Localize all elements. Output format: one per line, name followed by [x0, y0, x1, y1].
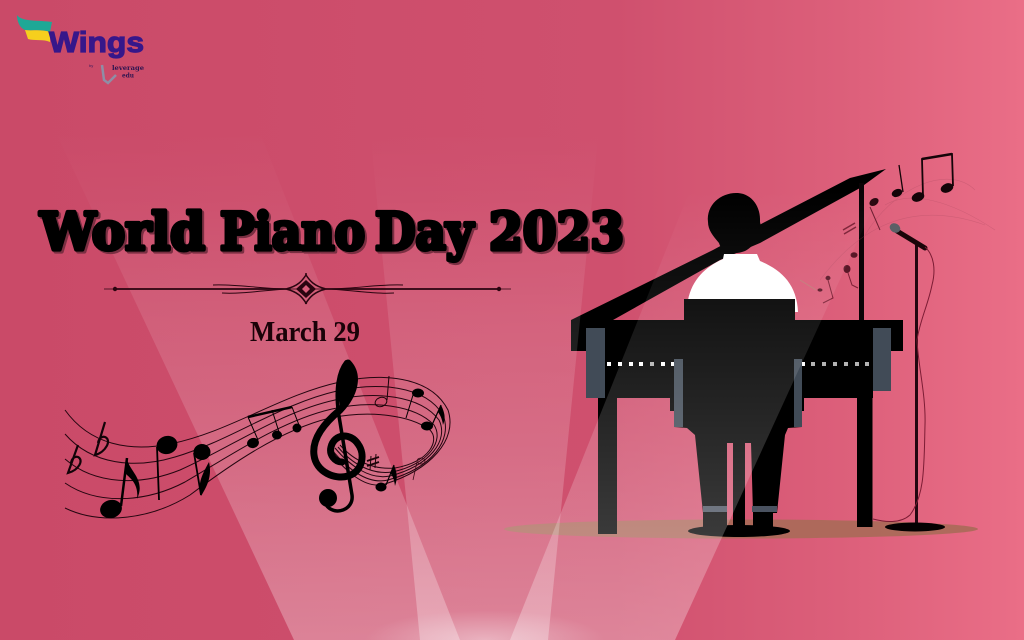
treble clef: [314, 360, 362, 511]
piano keys: [607, 362, 869, 366]
stand base: [885, 522, 945, 532]
logo: Wings by leverage edu: edu: [122, 72, 134, 80]
piano lid: [571, 169, 886, 320]
logo flag teal: [17, 15, 52, 32]
armrests: [674, 359, 683, 427]
lid prop: [859, 183, 864, 321]
beamed notes: [910, 154, 955, 204]
title: 2023: [491, 204, 626, 264]
title: World: [41, 204, 207, 264]
sharp sign: [367, 454, 379, 470]
piano legs: [598, 398, 617, 534]
floor shadow ellipse: [504, 520, 978, 538]
logo by: by: [89, 63, 93, 68]
center beam: [369, 120, 600, 640]
quarter note: [155, 434, 179, 500]
lower notes: [376, 465, 397, 492]
faint staff arcs: [820, 179, 995, 280]
left beam: [50, 120, 460, 640]
stand: [915, 245, 918, 527]
piano side panels: [586, 328, 605, 398]
pianist shirt: [688, 254, 798, 312]
title: Piano: [220, 202, 365, 262]
bottom glow: [365, 610, 605, 640]
ornamental divider: [104, 273, 511, 304]
music staff with clef and notes: [65, 360, 450, 521]
mic cable: [873, 247, 934, 522]
title: Piano: [222, 204, 367, 264]
logo flag yellow: [25, 30, 50, 42]
single note fading: [868, 196, 880, 230]
staff lines: [65, 377, 450, 518]
logo: Wings by leverage edu: [17, 15, 144, 83]
logo leverage edu: leverage: [112, 64, 144, 72]
title: [39, 202, 626, 264]
flagged note: [194, 444, 210, 496]
faded small notes: [800, 223, 858, 303]
flat signs: [68, 422, 108, 473]
mic head: [888, 221, 902, 235]
piano body: [571, 320, 903, 398]
date: March 29: [250, 317, 360, 348]
beamed triplet: [246, 407, 302, 449]
chair base: [688, 525, 790, 537]
upper right notes: [406, 388, 445, 430]
eighth note: [98, 458, 140, 521]
title: Day: [377, 204, 476, 264]
title: Day: [375, 202, 474, 262]
right beam: [510, 120, 913, 640]
title: 2023: [489, 202, 624, 262]
stage light beams: [50, 120, 913, 640]
mic body: [897, 231, 925, 248]
single note: [890, 165, 904, 199]
microphone on stand: [873, 221, 945, 531]
title: World: [39, 202, 205, 262]
trouser cuffs: [703, 506, 727, 512]
piano and pianist: [571, 169, 903, 537]
logo wordmark: Wings: [49, 27, 144, 59]
small hollow note: [413, 458, 425, 480]
logo mark: [102, 65, 116, 83]
pianist head: [708, 193, 761, 253]
notes rising from the piano: [800, 154, 995, 303]
hollow note: [374, 376, 389, 408]
chair and legs: [670, 299, 804, 527]
